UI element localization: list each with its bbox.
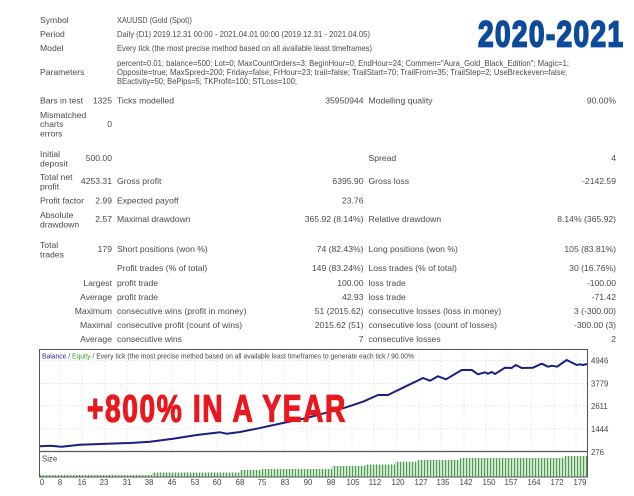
chart frame (40, 350, 588, 477)
row: maximal consecutive: Maximal (80, 320, 112, 330)
overlay: +800% in a year: +800% IN A YEAR (87, 389, 345, 431)
row: profit factor: Expected payoff (117, 196, 179, 206)
x axis labels: 172 (550, 478, 564, 487)
row: average consecutive (80, 334, 616, 344)
x axis labels: 60 (213, 478, 222, 487)
x axis labels: 98 (327, 478, 335, 487)
row: total net profit: Gross profit (117, 176, 162, 186)
row: initial deposit: 500.00 (86, 153, 112, 163)
row: largest: profit trade (117, 278, 158, 288)
y axis labels (591, 356, 609, 457)
x axis labels: 135 (436, 478, 450, 487)
row: parameters: Opposite=true; MaxSpred=200; Friday=false; FrHour=23; trail=false; TrailStart=70; TrailFrom=35; TrailStep=2; UseBreckeven=false; (117, 68, 567, 77)
row: total net profit (40, 172, 616, 192)
title: 2020-2021: 2020-2021 (478, 14, 623, 54)
row: total trades: Short positions (won %) (117, 244, 208, 254)
row: absolute drawdown: 8.14% (365.92) (557, 214, 616, 224)
x axis labels: 142 (459, 478, 473, 487)
row: bars in test (40, 96, 616, 106)
row: profit factor: 23.76 (342, 196, 364, 206)
y axis labels: 3779 (591, 380, 608, 388)
x axis labels: 83 (281, 478, 289, 487)
x axis labels: 90 (304, 478, 313, 487)
chart grid (40, 351, 587, 451)
row: total net profit: Total net (40, 172, 73, 182)
row: total trades: 105 (83.81%) (564, 244, 616, 254)
row: bars in test: 35950944 (325, 96, 364, 106)
row: absolute drawdown (40, 210, 616, 230)
row: profit factor: 2.99 (95, 196, 112, 206)
row: profit factor (40, 196, 364, 206)
row: total trades: Long positions (won %) (368, 244, 458, 254)
row: largest: 100.00 (337, 278, 364, 288)
x axis labels: 16 (78, 478, 86, 487)
row: average (80, 292, 616, 302)
x axis labels: 68 (236, 478, 244, 487)
row: average: Average (80, 292, 112, 302)
row: total trades: trades (40, 250, 64, 260)
row: absolute drawdown: Absolute (40, 210, 74, 220)
y axis labels: 276 (591, 448, 604, 457)
x axis labels: 23 (100, 478, 108, 487)
row: average: 42.93 (342, 292, 364, 302)
row: profit trades (117, 263, 616, 273)
row: period: Daily (D1) 2019.12.31 00:00 - 2021.04.01 00:00 (2019.12.31 - 2021.04.05) (117, 30, 370, 39)
y axis labels: 1444 (591, 425, 609, 434)
row: parameters (40, 59, 569, 86)
row: symbol (40, 15, 192, 25)
x axis labels: 112 (369, 478, 381, 487)
row: largest (83, 278, 616, 288)
x axis labels: 46 (168, 478, 176, 487)
row: symbol: XAUUSD (Gold (Spot)) (117, 16, 192, 25)
size bars (40, 456, 587, 477)
balance curve (40, 360, 587, 447)
row: largest: Largest (83, 278, 113, 288)
row: parameters: Parameters (40, 67, 84, 77)
x axis labels: 53 (191, 478, 199, 487)
row: maximum consecutive: consecutive losses (loss in money) (368, 306, 501, 316)
row: average: profit trade (117, 292, 158, 302)
row: maximal consecutive: consecutive profit (count of wins) (117, 320, 242, 330)
row: maximal consecutive: -300.00 (3) (574, 320, 616, 330)
y axis labels: 4946 (591, 356, 608, 366)
size label: Size (42, 454, 57, 464)
row: initial deposit: Initial (40, 149, 60, 159)
row: model: Model (40, 43, 63, 53)
x axis labels: 8 (58, 478, 62, 487)
row: total net profit: profit (40, 182, 60, 192)
row: initial deposit (40, 149, 616, 168)
row: mismatched charts errors: errors (40, 128, 62, 138)
x axis labels: 31 (123, 478, 131, 487)
row: profit trades: Loss trades (% of total) (368, 263, 457, 273)
row: absolute drawdown: 2.57 (95, 214, 112, 224)
row: total net profit: 4253.31 (81, 176, 112, 186)
row: model: Every tick (the most precise method based on all available least timeframes) (117, 44, 372, 53)
row: total net profit: -2142.59 (582, 176, 616, 186)
row: mismatched charts errors: Mismatched (40, 110, 87, 120)
row: mismatched charts errors: charts (40, 119, 63, 129)
row: total trades: 179 (98, 244, 112, 254)
report table (40, 15, 616, 344)
row: parameters: percent=0.01; balance=500; Lot=0; MaxCountOrders=3; BeginHour=0; EndHour=24; Commen="Aura_Gold_Black_Edition"; Magic=1; (117, 59, 569, 68)
x axis labels: 75 (258, 478, 267, 487)
row: bars in test: Ticks modelled (117, 96, 174, 106)
row: maximum consecutive (75, 306, 616, 316)
row: bars in test: 1325 (93, 96, 112, 106)
row: profit trades: Profit trades (% of total) (117, 263, 207, 273)
row: bars in test: Modelling quality (368, 96, 433, 106)
row: absolute drawdown: drawdown (40, 220, 79, 230)
row: maximal consecutive (80, 320, 616, 330)
row: period (40, 29, 370, 39)
x axis labels: 164 (527, 478, 541, 487)
row: profit trades: 30 (16.76%) (569, 263, 616, 273)
row: maximum consecutive: Maximum (75, 306, 112, 316)
row: average consecutive: 7 (359, 334, 364, 344)
balance chart (40, 350, 609, 487)
row: largest: -100.00 (587, 278, 616, 288)
row: maximal consecutive: consecutive loss (count of losses) (368, 320, 497, 330)
row: symbol: Symbol (40, 15, 69, 25)
row: mismatched charts errors (40, 110, 112, 138)
y axis labels: 2611 (591, 402, 608, 411)
row: absolute drawdown: Relative drawdown (368, 214, 441, 224)
row: initial deposit: Spread (368, 153, 396, 163)
row: initial deposit: 4 (611, 153, 616, 163)
x axis labels: 127 (414, 478, 428, 487)
row: model (40, 43, 372, 53)
row: total net profit: Gross loss (368, 176, 409, 186)
row: bars in test: 90.00% (587, 96, 616, 106)
row: total trades: Total (40, 240, 58, 250)
row: maximum consecutive: consecutive wins (profit in money) (117, 306, 247, 316)
x axis labels: 38 (145, 478, 153, 487)
row: average consecutive: consecutive wins (117, 334, 182, 344)
row: largest: loss trade (368, 278, 406, 288)
row: initial deposit: deposit (40, 158, 68, 168)
row: average: -71.42 (592, 292, 616, 302)
row: absolute drawdown: 365.92 (8.14%) (305, 214, 364, 224)
row: total trades: 74 (82.43%) (317, 244, 364, 254)
x axis labels (40, 478, 587, 487)
row: total net profit: 6395.90 (332, 176, 364, 186)
row: average: loss trade (368, 292, 406, 302)
row: period: Period (40, 29, 65, 39)
row: maximal consecutive: 2015.62 (51) (315, 320, 364, 330)
x axis labels: 157 (504, 478, 518, 487)
row: absolute drawdown: Maximal drawdown (117, 214, 191, 224)
x axis labels: 105 (346, 478, 360, 487)
row: mismatched charts errors: 0 (107, 119, 112, 129)
x axis labels: 150 (482, 478, 496, 487)
row: maximum consecutive: 51 (2015.62) (315, 306, 364, 316)
chart legend: Balance / Equity / Every tick (the most precise method based on all available least timeframes to generate each tick / 90.00% (42, 352, 414, 360)
row: profit factor: Profit factor (40, 196, 84, 206)
row: parameters: BEactivity=50; BePips=5; TKProfit=100; STLoss=100; (117, 77, 297, 86)
row: average consecutive: 2 (611, 334, 616, 344)
row: maximum consecutive: 3 (-300.00) (574, 306, 616, 316)
row: profit trades: 149 (83.24%) (312, 263, 364, 273)
row: bars in test: Bars in test (40, 96, 84, 106)
x axis labels: 120 (391, 478, 405, 487)
row: average consecutive: consecutive losses (368, 334, 441, 344)
row: average consecutive: Average (80, 334, 112, 344)
x axis labels: 179 (573, 478, 587, 487)
row: total trades (40, 240, 616, 260)
x axis labels: 0 (40, 478, 45, 487)
